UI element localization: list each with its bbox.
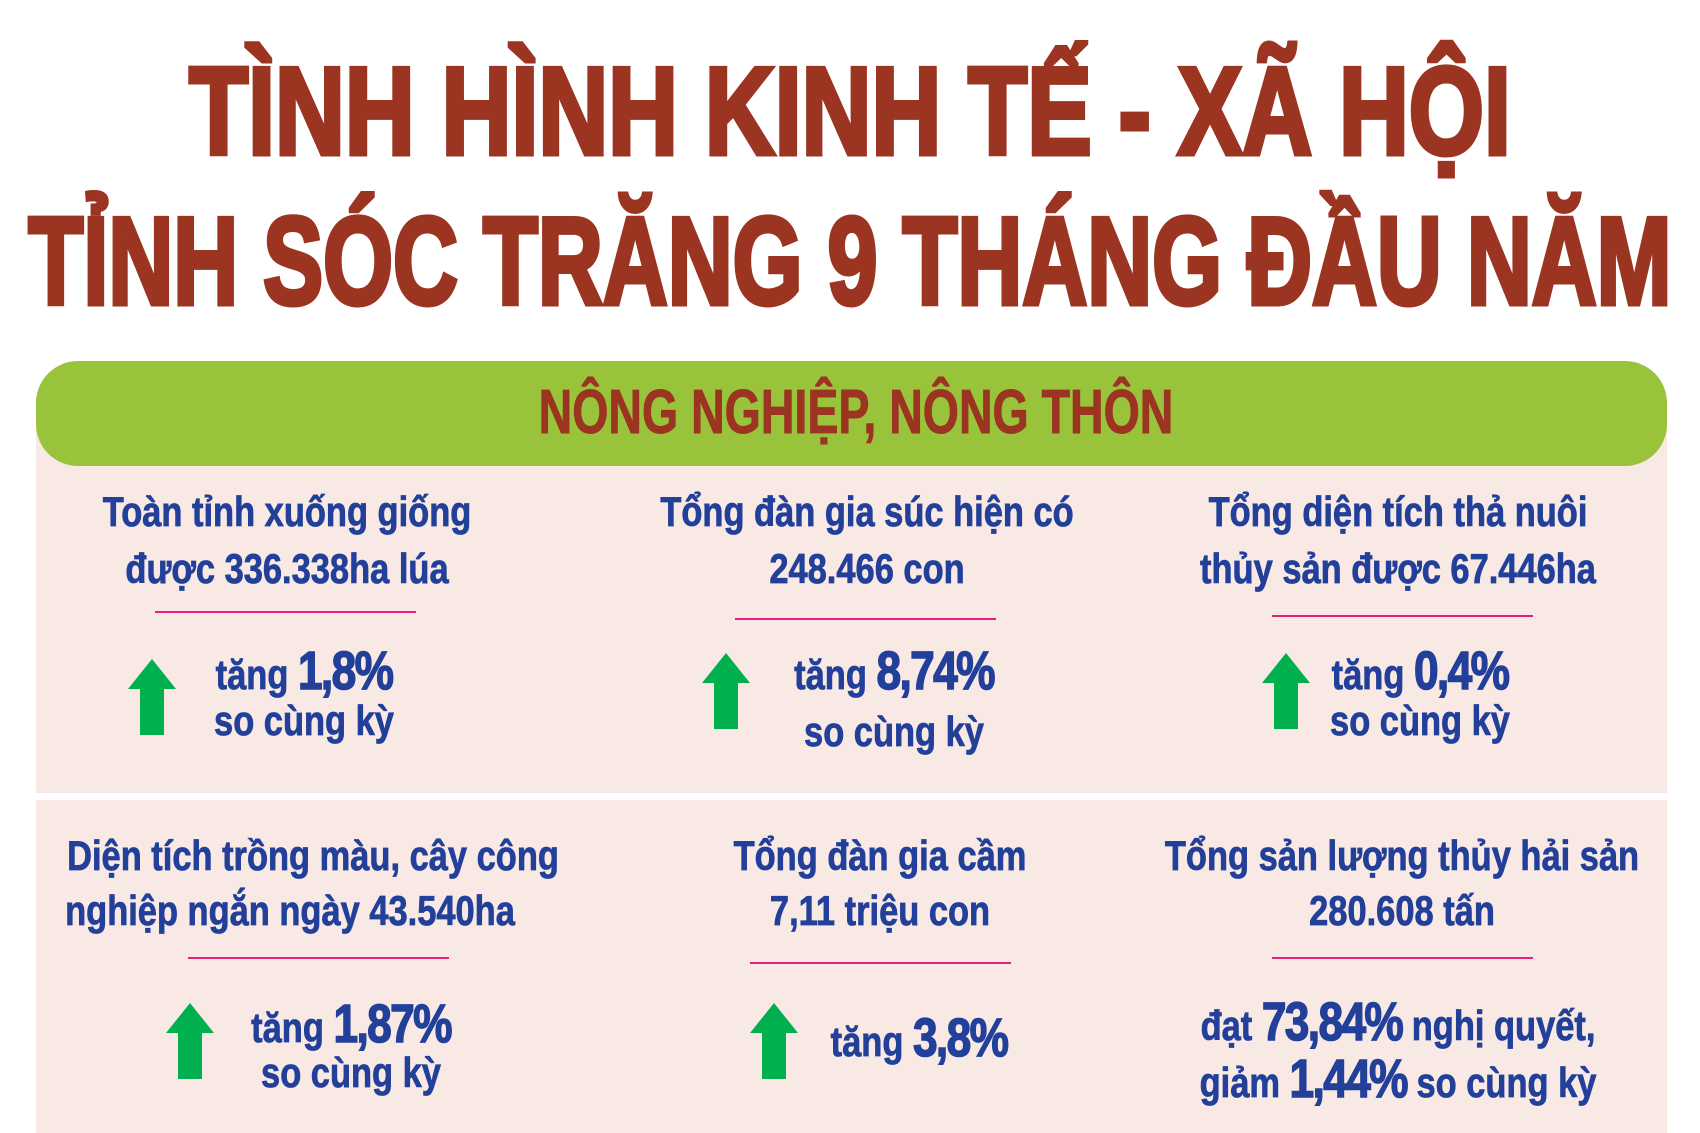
text: livestock title: Tổng đàn gia súc hiện có bbox=[660, 488, 1074, 535]
text: crops value: nghiệp ngắn ngày 43.540ha bbox=[65, 887, 515, 934]
text: same period: so cùng kỳ bbox=[261, 1049, 441, 1096]
card: aquaculture area bbox=[1200, 488, 1596, 744]
text: rice title: Toàn tỉnh xuống giống bbox=[103, 488, 471, 535]
card: rice bbox=[102, 488, 471, 744]
text: livestock value: 248.466 con bbox=[769, 545, 965, 592]
heading bar bbox=[36, 361, 1667, 466]
card: seafood output bbox=[1164, 832, 1639, 1109]
divider line bbox=[735, 618, 996, 620]
text: seafood value: 280.608 tấn bbox=[1309, 887, 1495, 934]
card: crops bbox=[65, 832, 559, 1096]
text: increase: tăng 3,8% bbox=[831, 1008, 1007, 1068]
text: seafood title: Tổng sản lượng thủy hải sản bbox=[1165, 832, 1639, 879]
text: same period: so cùng kỳ bbox=[804, 708, 984, 755]
icon: up arrow bbox=[750, 1003, 798, 1079]
white divider bbox=[36, 793, 1667, 800]
text: poultry value: 7,11 triệu con bbox=[770, 887, 990, 934]
text: same period: so cùng kỳ bbox=[1330, 697, 1510, 744]
divider line bbox=[1272, 957, 1533, 959]
text: poultry title: Tổng đàn gia cầm bbox=[734, 832, 1026, 879]
icon: up arrow bbox=[166, 1003, 214, 1079]
text: increase: tăng 1,8% bbox=[216, 641, 392, 701]
panel background bbox=[36, 401, 1667, 1133]
divider line bbox=[750, 962, 1011, 964]
title line 2: TỈNH SÓC TRĂNG 9 THÁNG ĐẦU NĂM bbox=[28, 193, 1672, 331]
text: aquaculture title: Tổng diện tích thả nuôi bbox=[1209, 488, 1587, 535]
divider line bbox=[1272, 615, 1533, 617]
text: decrease: giảm 1,44% so cùng kỳ bbox=[1200, 1049, 1596, 1109]
icon: up arrow bbox=[1262, 653, 1310, 729]
icon: up arrow bbox=[128, 659, 176, 735]
text: aquaculture value: thủy sản được 67.446ha bbox=[1200, 545, 1596, 592]
text: increase: tăng 8,74% bbox=[794, 641, 994, 701]
text: increase: tăng 0,4% bbox=[1332, 641, 1508, 701]
panel: agriculture bbox=[36, 361, 1667, 1133]
divider line bbox=[155, 611, 416, 613]
text: resolution: đạt 73,84% nghị quyết, bbox=[1201, 992, 1595, 1052]
icon: up arrow bbox=[702, 653, 750, 729]
text: increase: tăng 1,87% bbox=[251, 994, 451, 1054]
text: rice value: được 336.338ha lúa bbox=[125, 545, 449, 592]
heading text: NÔNG NGHIỆP, NÔNG THÔN bbox=[539, 378, 1173, 447]
divider line bbox=[188, 957, 449, 959]
title line 1: TÌNH HÌNH KINH TẾ - XÃ HỘI bbox=[189, 43, 1511, 181]
card: poultry bbox=[734, 832, 1026, 1079]
card: livestock bbox=[660, 488, 1074, 755]
text: crops title: Diện tích trồng màu, cây công bbox=[67, 832, 559, 879]
text: same period: so cùng kỳ bbox=[214, 697, 394, 744]
